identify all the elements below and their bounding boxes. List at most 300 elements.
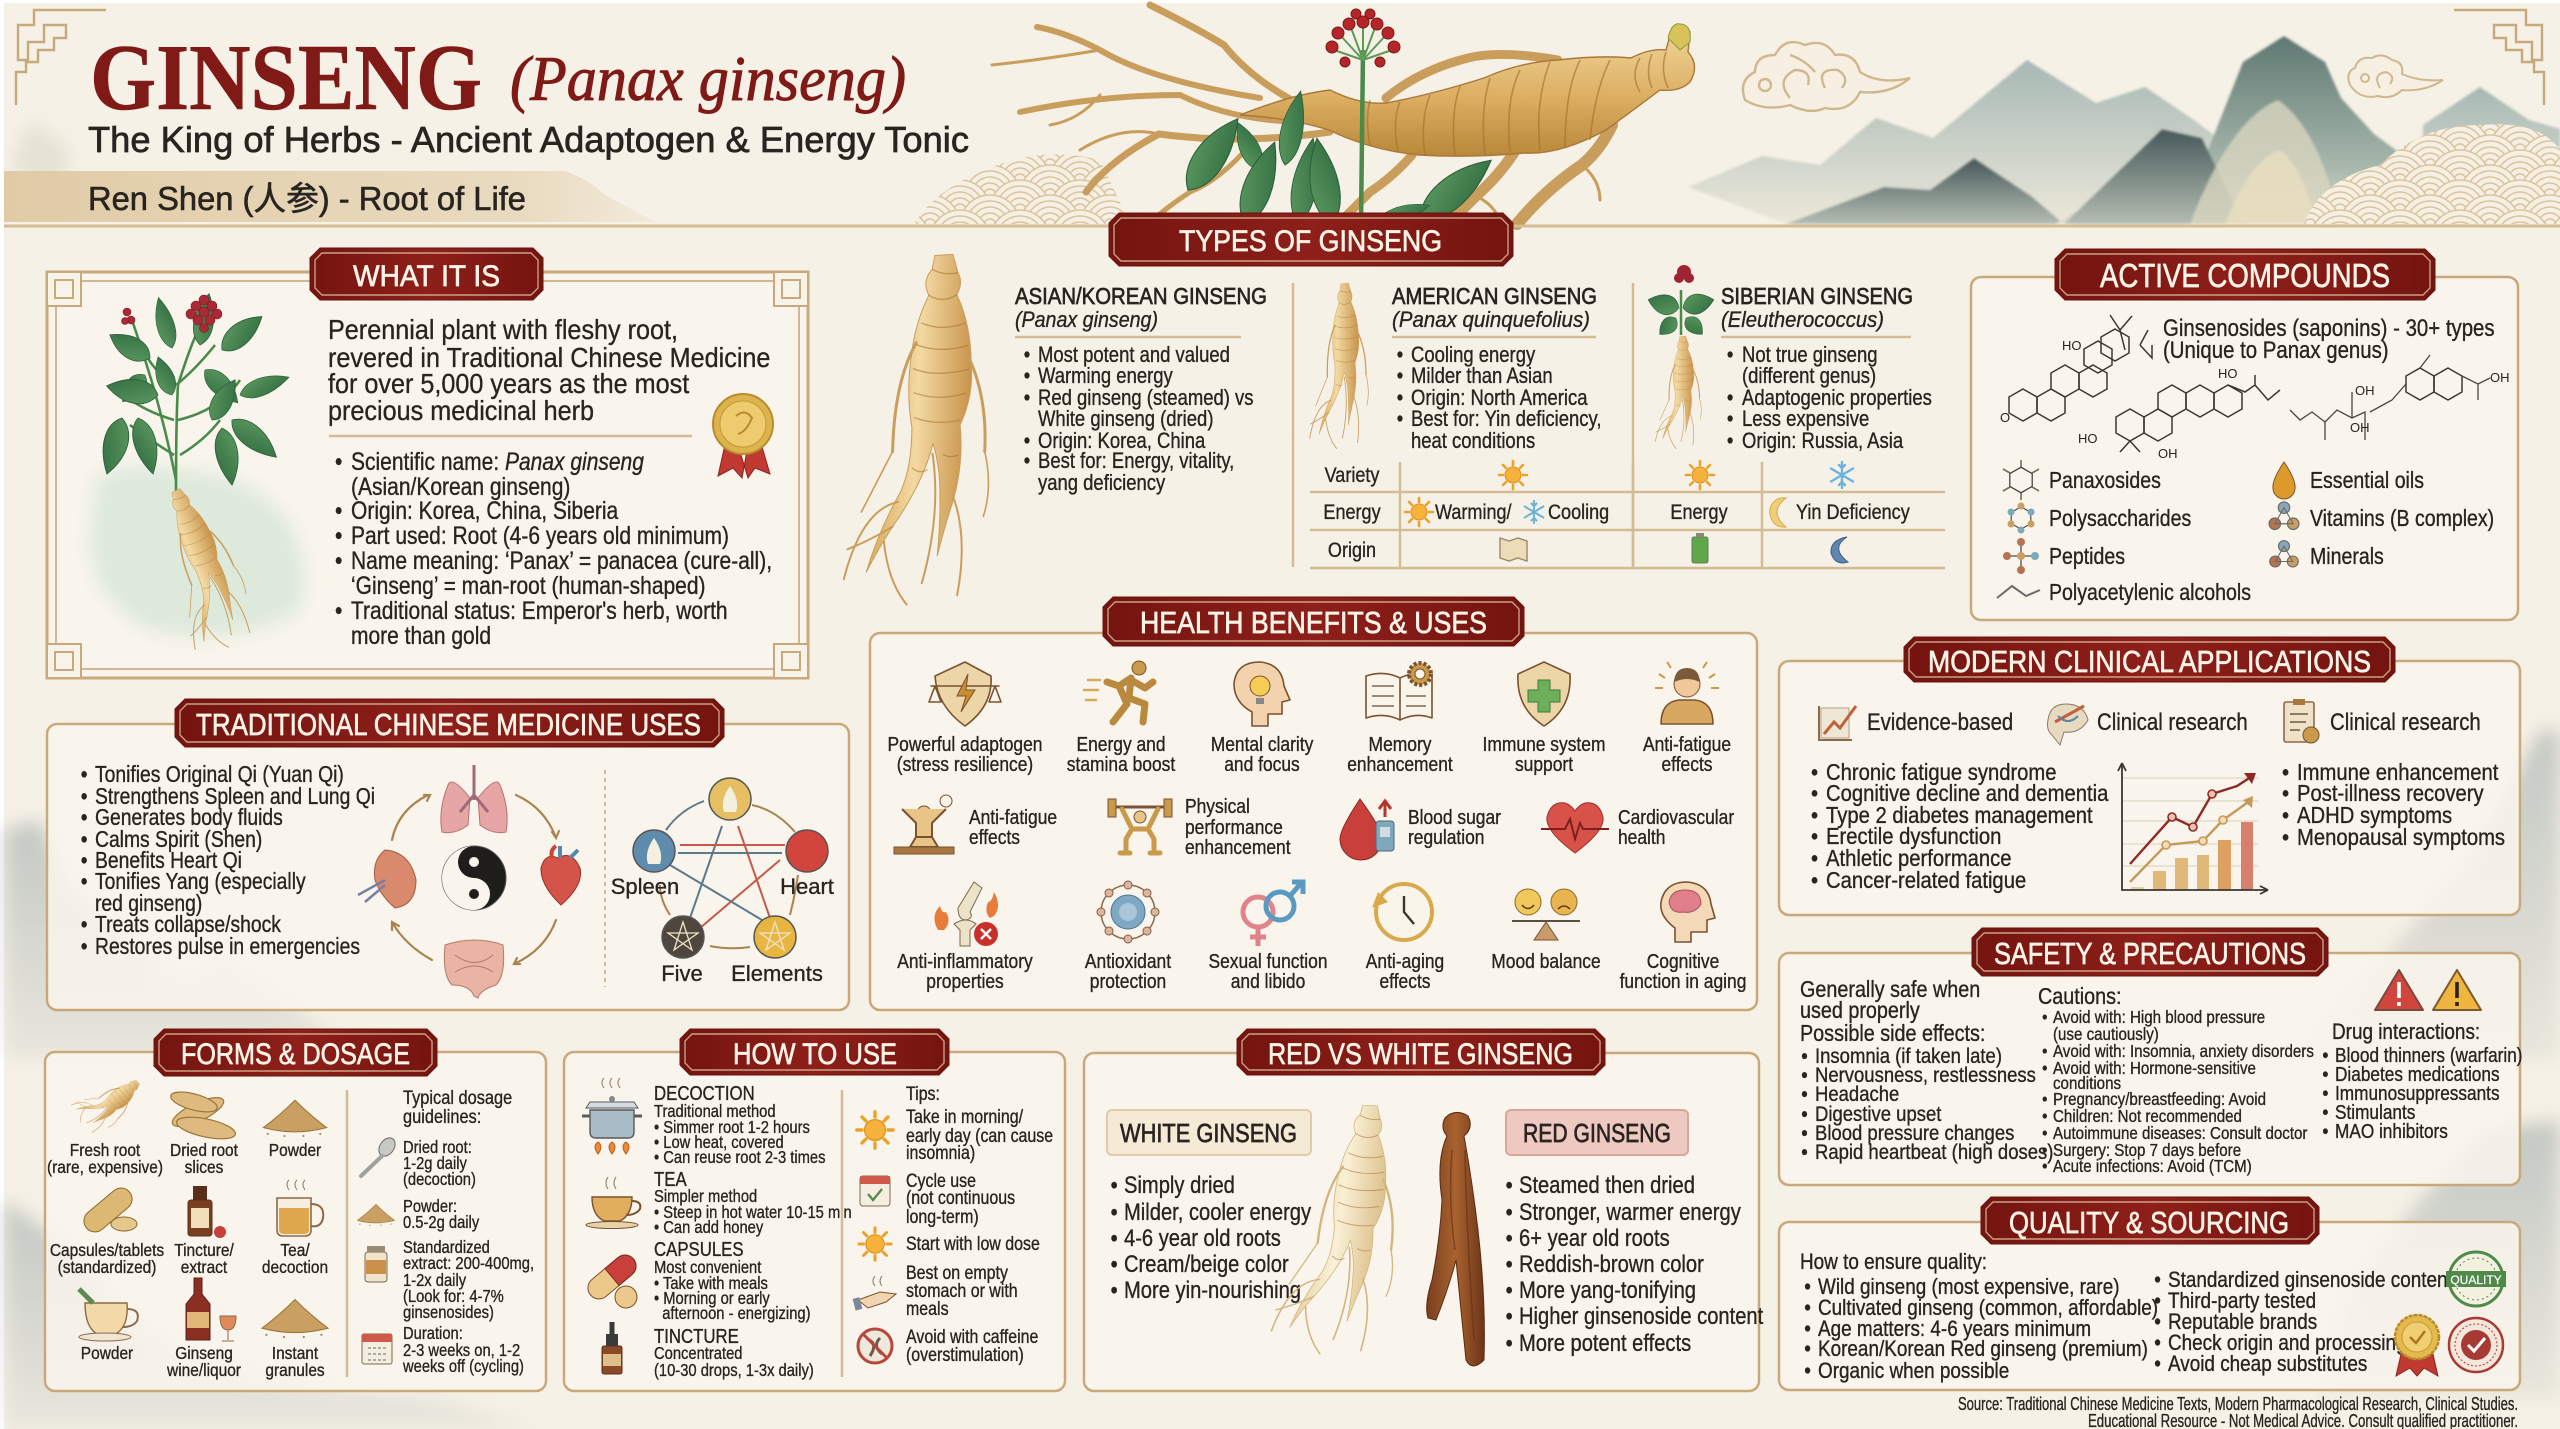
comparison table xyxy=(1310,461,1945,568)
form: powder: Powder xyxy=(269,1140,322,1160)
asian ginseng text: • xyxy=(1024,387,1030,410)
dosage guidelines: 0.5-2g daily xyxy=(403,1213,480,1232)
molecular structure diagrams: OH xyxy=(2490,370,2510,385)
benefit: adaptogen: Powerful adaptogen xyxy=(888,734,1042,756)
siberian ginseng text: Origin: Russia, Asia xyxy=(1742,430,1904,453)
tcm list: Generates body fluids xyxy=(95,806,283,830)
panel: safety and precautions: • xyxy=(1801,1103,1808,1126)
icon: snowflake xyxy=(1831,462,1853,488)
dosage guidelines: ginsenosides) xyxy=(403,1303,494,1322)
benefit: anti-fatigue resting: effects xyxy=(969,827,1020,849)
tips text xyxy=(906,1083,1053,1365)
american ginseng text xyxy=(1392,283,1602,453)
clinical list right: • xyxy=(2282,824,2289,850)
panel: quality and sourcing: • xyxy=(1804,1337,1811,1361)
chart: rising research trend xyxy=(2118,763,2268,894)
panel: safety and precautions: Avoid with: Hormone-sensitive xyxy=(2053,1058,2256,1078)
form: dried root slices xyxy=(169,1088,238,1177)
icon: pot on flame xyxy=(582,1078,642,1154)
molecular structure diagrams: HO xyxy=(2078,431,2098,446)
form: tea powder cup xyxy=(79,1289,138,1363)
tips text: Avoid with caffeine xyxy=(906,1326,1038,1347)
benefit: sexual function xyxy=(1208,882,1328,993)
chinese name line: Ren Shen (人参) - Root of Life xyxy=(88,180,526,217)
benefit: antioxidant: Antioxidant xyxy=(1085,951,1172,973)
preparation methods text: DECOCTION xyxy=(654,1082,755,1104)
heading: how to use xyxy=(680,1029,949,1075)
quality list right xyxy=(2154,1268,2453,1376)
clinical list left: Cancer-related fatigue xyxy=(1826,867,2026,893)
panel: safety and precautions: • xyxy=(2322,1121,2328,1143)
asian ginseng text xyxy=(1015,283,1267,495)
tcm list: • xyxy=(81,849,87,873)
quality list right: Avoid cheap substitutes xyxy=(2168,1352,2367,1376)
form: dried root slices: slices xyxy=(185,1157,223,1177)
diagram: organ cycle xyxy=(358,765,581,998)
compound list: Minerals xyxy=(2310,544,2384,569)
dosage guidelines: Standardized xyxy=(403,1238,490,1257)
panel: safety and precautions: • xyxy=(1801,1141,1808,1164)
benefit: anti-aging: Anti-aging xyxy=(1366,951,1444,973)
heading: red vs white: RED VS WHITE GINSENG xyxy=(1268,1038,1573,1071)
siberian ginseng text: • xyxy=(1727,344,1733,367)
comparison table: Energy xyxy=(1670,501,1728,524)
tips text: (not continuous xyxy=(906,1187,1015,1208)
clinical list right: Post-illness recovery xyxy=(2297,780,2484,806)
red ginseng list: • xyxy=(1506,1250,1513,1277)
panel: safety and precautions: Insomnia (if taken late) xyxy=(1815,1045,2002,1068)
siberian ginseng text: • xyxy=(1727,430,1733,453)
form: instant granules: Instant xyxy=(272,1343,319,1363)
title: (Panax ginseng) xyxy=(510,43,906,114)
heading: how to use: HOW TO USE xyxy=(733,1038,897,1071)
icon: yellow warning triangle xyxy=(2433,970,2481,1010)
compound list: Polyacetylenic alcohols xyxy=(2049,580,2251,605)
panel: safety and precautions: Headache xyxy=(1815,1083,1899,1106)
preparation methods text: afternoon - energizing) xyxy=(662,1304,811,1323)
tips text: Tips: xyxy=(906,1083,940,1104)
icon: spoon xyxy=(361,1135,398,1176)
form: tincture extract xyxy=(174,1186,234,1277)
benefit: anti-fatigue person: Anti-fatigue xyxy=(1643,734,1731,756)
panel: safety and precautions: • xyxy=(2042,1156,2048,1176)
preparation methods text: • Can reuse root 2-3 times xyxy=(654,1148,825,1167)
asian ginseng text: Most potent and valued xyxy=(1038,344,1230,367)
facts list: • xyxy=(335,521,342,549)
icon: capsule and pill xyxy=(583,1251,641,1308)
icon: extract bottle xyxy=(365,1246,387,1282)
icon: moon xyxy=(1831,537,1848,563)
panel: safety and precautions xyxy=(1779,928,2523,1185)
drug interactions text: Drug interactions: xyxy=(2332,1020,2480,1044)
icon: calendar check xyxy=(860,1176,890,1206)
facts list: ‘Ginseng’ = man-root (human-shaped) xyxy=(351,571,706,599)
icon: energy sun xyxy=(1686,461,1714,489)
tcm list: • xyxy=(81,806,87,830)
form: tincture extract: extract xyxy=(181,1257,228,1277)
diagram: five elements: Spleen xyxy=(611,874,679,899)
form: instant granules: granules xyxy=(265,1360,325,1380)
organ: intestine xyxy=(444,940,504,998)
clinical list left: Cognitive decline and dementia xyxy=(1826,780,2109,806)
tips text: Start with low dose xyxy=(906,1233,1040,1254)
panel: safety and precautions: Immunosuppressants xyxy=(2335,1083,2500,1105)
heading: tcm uses: TRADITIONAL CHINESE MEDICINE USES xyxy=(196,707,701,742)
intro text: revered in Traditional Chinese Medicine xyxy=(328,342,770,373)
icon: brain research xyxy=(2048,704,2088,745)
panel: safety and precautions: • xyxy=(2042,1058,2048,1078)
tips text: (overstimulation) xyxy=(906,1344,1024,1365)
panel: safety and precautions: Rapid heartbeat (high doses) xyxy=(1815,1141,2053,1164)
form: capsules and tablets xyxy=(50,1184,164,1277)
heading: red vs white xyxy=(1237,1029,1605,1075)
siberian ginseng text: Not true ginseng xyxy=(1742,344,1877,367)
dosage guidelines: Dried root: xyxy=(403,1138,472,1157)
illustration: ginseng plant with root xyxy=(90,292,304,659)
form: capsules and tablets: (standardized) xyxy=(58,1257,156,1277)
white ginseng list: • xyxy=(1111,1250,1118,1277)
preparation methods text: (10-30 drops, 1-3x daily) xyxy=(654,1361,814,1380)
clinical list left: Type 2 diabetes management xyxy=(1826,802,2093,828)
benefit: blood sugar: Blood sugar xyxy=(1408,807,1502,829)
dosage guidelines: Typical dosage xyxy=(403,1087,512,1108)
tcm list: red ginseng) xyxy=(95,892,202,916)
facts list: Traditional status: Emperor's herb, worth xyxy=(351,596,728,624)
heading: modern clinical applications: MODERN CLINICAL APPLICATIONS xyxy=(1928,644,2371,679)
panel: safety and precautions: (use cautiously) xyxy=(2053,1024,2159,1044)
icon: quality stamp: QUALITY xyxy=(2450,1273,2502,1287)
form: ginseng wine xyxy=(166,1278,241,1380)
panel: safety and precautions: • xyxy=(1801,1083,1808,1106)
dosage guidelines: 1-2g daily xyxy=(403,1154,468,1173)
icon: quality stamp xyxy=(2446,1252,2506,1306)
clinical list right xyxy=(2282,759,2505,850)
organ: heart xyxy=(541,846,581,905)
panel: quality and sourcing: Cultivated ginseng (common, affordable) xyxy=(1818,1296,2158,1320)
comparison table: Warming/ xyxy=(1435,501,1512,524)
american ginseng text: (Panax quinquefolius) xyxy=(1392,307,1590,332)
quality list right: • xyxy=(2154,1331,2161,1355)
tips text: long-term) xyxy=(906,1206,979,1227)
facts list: • xyxy=(335,596,342,624)
tips text: meals xyxy=(906,1298,949,1319)
clinical list left: • xyxy=(1811,823,1818,849)
heading: safety xyxy=(1972,928,2328,976)
heading: active compounds: ACTIVE COMPOUNDS xyxy=(2100,257,2390,294)
intro text xyxy=(328,314,770,426)
panel: safety and precautions: Pregnancy/breastfeeding: Avoid xyxy=(2053,1089,2266,1109)
icon: evidence chart xyxy=(1819,706,1856,740)
comparison table: Energy xyxy=(1323,501,1381,524)
comparison table: Variety xyxy=(1325,464,1380,487)
tips text: insomnia) xyxy=(906,1142,975,1163)
red ginseng list: Steamed then dried xyxy=(1519,1171,1695,1198)
molecular structure diagrams: OH xyxy=(2350,420,2370,435)
panel: safety and precautions: • xyxy=(2042,1123,2048,1143)
preparation methods text: • Simmer root 1-2 hours xyxy=(654,1118,810,1137)
tips text: stomach or with xyxy=(906,1280,1018,1301)
heading: types of ginseng xyxy=(1109,213,1513,266)
clinical list right: • xyxy=(2282,759,2289,785)
benefit: immune system xyxy=(1483,662,1605,776)
benefit: anti-aging xyxy=(1366,884,1444,993)
dosage guidelines: 2-3 weeks on, 1-2 xyxy=(403,1341,520,1360)
dosage guidelines: extract: 200-400mg, xyxy=(403,1254,534,1273)
icon: gold medal check xyxy=(2395,1315,2439,1376)
heading: tcm uses xyxy=(175,699,724,747)
intro text: for over 5,000 years as the most xyxy=(328,368,690,399)
benefit: anti-inflammatory xyxy=(897,882,1033,993)
white ginseng list: More yin-nourishing xyxy=(1124,1276,1301,1303)
diagram: five elements: Heart xyxy=(780,874,834,899)
clinical list left: Chronic fatigue syndrome xyxy=(1826,759,2057,785)
quality list left: How to ensure quality: xyxy=(1800,1250,1987,1274)
asian ginseng text: Best for: Energy, vitality, xyxy=(1038,450,1234,473)
panel: red vs white ginseng xyxy=(1084,1029,1763,1391)
white ginseng list: • xyxy=(1111,1224,1118,1251)
benefit: sexual function: and libido xyxy=(1231,971,1305,993)
american ginseng text: AMERICAN GINSENG xyxy=(1392,283,1597,309)
preparation methods text: Most convenient xyxy=(654,1258,762,1277)
asian ginseng text: • xyxy=(1024,450,1030,473)
heading: what it is xyxy=(310,248,543,300)
diagram: five elements xyxy=(611,778,834,986)
decorative wave pattern right xyxy=(2304,124,2560,224)
tcm list: • xyxy=(81,763,87,787)
tips text: early day (can cause xyxy=(906,1125,1053,1146)
benefit: anti-fatigue resting xyxy=(894,795,1057,854)
icon: warming sun xyxy=(1499,461,1527,489)
tcm list: Treats collapse/shock xyxy=(95,913,281,937)
panel: active compounds xyxy=(1971,249,2518,620)
panel: safety and precautions: Children: Not recommended xyxy=(2053,1106,2242,1126)
molecular structure diagrams: OH xyxy=(2355,383,2374,398)
cautions text: Cautions: xyxy=(2038,984,2122,1009)
panel: modern clinical applications: Clinical research xyxy=(2330,708,2481,735)
tcm list: • xyxy=(81,913,87,937)
benefit: energy and stamina: stamina boost xyxy=(1067,754,1176,776)
cloud right xyxy=(2348,55,2443,97)
panel: forms and dosage xyxy=(45,1029,546,1391)
tips text: Take in morning/ xyxy=(906,1106,1023,1127)
icon: no caffeine xyxy=(858,1329,892,1363)
panel: safety and precautions: conditions xyxy=(2053,1073,2121,1093)
molecular structure diagrams: O xyxy=(2000,410,2010,425)
white ginseng list: Cream/beige color xyxy=(1124,1250,1289,1277)
preparation methods text: TEA xyxy=(654,1168,687,1190)
tcm list: Strengthens Spleen and Lung Qi xyxy=(95,785,375,809)
benefit: physical performance xyxy=(1108,796,1291,859)
form: tea powder cup: Powder xyxy=(81,1343,134,1363)
heading: modern clinical applications xyxy=(1904,637,2395,682)
red ginseng list: • xyxy=(1506,1302,1513,1329)
subtitle: The King of Herbs - Ancient Adaptogen & Energy Tonic xyxy=(88,119,969,160)
facts list: Name meaning: ‘Panax’ = panacea (cure-all), xyxy=(351,546,772,574)
comparison table: Yin Deficiency xyxy=(1796,501,1910,524)
facts list: • xyxy=(335,546,342,574)
preparation methods text: Simpler method xyxy=(654,1187,757,1206)
panel: safety and precautions: • xyxy=(2042,1106,2048,1126)
panel: traditional chinese medicine uses xyxy=(47,699,849,1010)
siberian ginseng text: (different genus) xyxy=(1742,365,1876,388)
panel: safety and precautions: • xyxy=(2042,1007,2048,1027)
side effects text xyxy=(1800,977,1985,1046)
quality list right: Check origin and processing xyxy=(2168,1331,2407,1355)
cloud left xyxy=(1743,42,1910,111)
heading: forms and dosage xyxy=(154,1029,437,1076)
benefit: anti-inflammatory: Anti-inflammatory xyxy=(897,951,1033,973)
compound list: Polysaccharides xyxy=(2049,506,2191,531)
intro text: precious medicinal herb xyxy=(328,395,594,426)
form: tincture extract: Tincture/ xyxy=(174,1240,234,1260)
american ginseng text: Origin: North America xyxy=(1411,387,1588,410)
siberian ginseng text: • xyxy=(1727,387,1733,410)
icon: peptides xyxy=(2003,538,2039,574)
dosage guidelines: Powder: xyxy=(403,1197,457,1216)
form: instant granules xyxy=(262,1300,328,1380)
red ginseng list: 6+ year old roots xyxy=(1519,1224,1670,1251)
header rule xyxy=(4,224,2560,228)
molecular structure diagrams xyxy=(2000,315,2510,461)
ginsenosides label: (Unique to Panax genus) xyxy=(2163,336,2389,363)
tcm list: • xyxy=(81,785,87,809)
icon: polysaccharides xyxy=(2008,502,2034,534)
benefit: memory: enhancement xyxy=(1347,754,1453,776)
decorative wave pattern left xyxy=(914,154,1130,224)
preparation methods text: Traditional method xyxy=(654,1102,776,1121)
panel: quality and sourcing: Korean/Korean Red ginseng (premium) xyxy=(1818,1337,2148,1361)
tcm list: Benefits Heart Qi xyxy=(95,849,242,873)
benefit: antioxidant: protection xyxy=(1090,971,1166,993)
compound list xyxy=(1997,460,2494,605)
clinical list left: • xyxy=(1811,845,1818,871)
panel: safety and precautions: Diabetes medications xyxy=(2335,1064,2500,1086)
hero ginseng root illustration xyxy=(992,5,1695,224)
panel: what it is xyxy=(47,248,808,678)
panel: safety and precautions: • xyxy=(2322,1064,2328,1086)
molecular structure diagrams: HO xyxy=(2062,338,2082,353)
panel: safety and precautions: Surgery: Stop 7 days before xyxy=(2053,1140,2241,1160)
heading: active compounds xyxy=(2055,249,2435,300)
panel: safety and precautions: Digestive upset xyxy=(1815,1103,1942,1126)
tips text: Cycle use xyxy=(906,1170,976,1191)
clinical list left xyxy=(1811,759,2109,893)
dosage guidelines xyxy=(357,1087,534,1376)
red ginseng list: Stronger, warmer energy xyxy=(1519,1198,1742,1225)
panel: safety and precautions: Stimulants xyxy=(2335,1102,2415,1124)
title: GINSENG xyxy=(90,26,482,130)
dosage guidelines: (Look for: 4-7% xyxy=(403,1287,504,1306)
asian ginseng text: • xyxy=(1024,344,1030,367)
white ginseng list: Milder, cooler energy xyxy=(1124,1198,1312,1225)
tips text: Best on empty xyxy=(906,1262,1008,1283)
form: capsules and tablets: Capsules/tablets xyxy=(50,1240,164,1260)
clinical list left: Athletic performance xyxy=(1826,845,2012,871)
benefit: anti-fatigue person xyxy=(1643,662,1731,776)
facts list: • xyxy=(335,447,342,475)
organ: lungs xyxy=(441,765,507,833)
clinical list left: Erectile dysfunction xyxy=(1826,823,2001,849)
benefit: memory xyxy=(1347,663,1453,776)
facts list: Origin: Korea, China, Siberia xyxy=(351,496,618,524)
preparation methods text: • Can add honey xyxy=(654,1218,764,1237)
benefit: immune system: Immune system xyxy=(1483,734,1605,756)
asian ginseng text: (Panax ginseng) xyxy=(1015,307,1158,332)
asian ginseng text: White ginseng (dried) xyxy=(1038,408,1213,431)
siberian ginseng text: SIBERIAN GINSENG xyxy=(1721,283,1913,309)
heading: forms and dosage: FORMS & DOSAGE xyxy=(181,1038,410,1071)
american ginseng text: • xyxy=(1397,408,1403,431)
source note xyxy=(1958,1394,2518,1429)
siberian ginseng text: (Eleutherococcus) xyxy=(1721,307,1884,332)
panel: quality and sourcing: Wild ginseng (most expensive, rare) xyxy=(1818,1275,2120,1299)
header tan band xyxy=(4,171,655,222)
panel: health benefits and uses xyxy=(870,597,1757,1010)
panel: quality and sourcing: Age matters: 4-6 years minimum xyxy=(1818,1317,2091,1341)
icon: powder xyxy=(357,1204,395,1226)
benefit: cognitive function: Cognitive xyxy=(1647,951,1719,973)
clinical list right: • xyxy=(2282,780,2289,806)
heading: what it is: WHAT IT IS xyxy=(353,260,500,293)
clinical list right: • xyxy=(2282,802,2289,828)
dosage guidelines: guidelines: xyxy=(403,1106,481,1127)
panel: safety and precautions: • xyxy=(2322,1102,2328,1124)
panel: safety and precautions: • xyxy=(2322,1045,2328,1067)
ginsenosides label xyxy=(2163,314,2495,363)
label: white ginseng: WHITE GINSENG xyxy=(1120,1118,1297,1148)
label: red ginseng xyxy=(1506,1110,1688,1155)
ginsenosides label: Ginsenosides (saponins) - 30+ types xyxy=(2163,314,2495,341)
panel: quality and sourcing: • xyxy=(1804,1317,1811,1341)
tcm list: Calms Spirit (Shen) xyxy=(95,828,262,852)
white ginseng list: • xyxy=(1111,1198,1118,1225)
benefit: cognitive function xyxy=(1620,882,1746,993)
benefit: anti-aging: effects xyxy=(1379,971,1431,993)
compound list: Panaxosides xyxy=(2049,468,2161,493)
comparison table: Origin xyxy=(1328,539,1376,562)
panel: modern clinical applications: Clinical research xyxy=(2097,708,2248,735)
clinical list right: Menopausal symptoms xyxy=(2297,824,2505,850)
asian ginseng text: Origin: Korea, China xyxy=(1038,430,1206,453)
tcm list: Tonifies Original Qi (Yuan Qi) xyxy=(95,763,344,787)
icon: small snowflake xyxy=(1525,501,1543,523)
benefit: physical performance: performance xyxy=(1185,817,1283,839)
heading: quality and sourcing xyxy=(1981,1197,2319,1244)
dosage guidelines: weeks off (cycling) xyxy=(402,1357,524,1376)
tcm list: • xyxy=(81,828,87,852)
dosage guidelines: 1-2x daily xyxy=(403,1271,467,1290)
heading: quality and sourcing: QUALITY & SOURCING xyxy=(2009,1205,2289,1240)
quality list right: Standardized ginsenoside content xyxy=(2168,1268,2453,1292)
label: white ginseng xyxy=(1107,1110,1311,1155)
white ginseng list: • xyxy=(1111,1171,1118,1198)
siberian ginseng text: Adaptogenic properties xyxy=(1742,387,1932,410)
clinical list left: • xyxy=(1811,867,1818,893)
panel: quality and sourcing: • xyxy=(1804,1296,1811,1320)
preparation methods text: CAPSULES xyxy=(654,1238,744,1260)
corner fret ornaments xyxy=(16,10,2544,105)
quality list right: • xyxy=(2154,1352,2161,1376)
tcm list: • xyxy=(81,870,87,894)
illustration: siberian ginseng plant xyxy=(1646,265,1716,449)
benefit: cardiovascular: health xyxy=(1618,827,1665,849)
benefit: energy and stamina xyxy=(1067,661,1176,776)
molecular structure diagrams: OH xyxy=(2158,446,2178,461)
clinical list right: ADHD symptoms xyxy=(2297,802,2452,828)
siberian ginseng text: • xyxy=(1727,408,1733,431)
form: ginseng wine: Ginseng xyxy=(175,1343,233,1363)
icon: tea cup xyxy=(586,1177,640,1228)
